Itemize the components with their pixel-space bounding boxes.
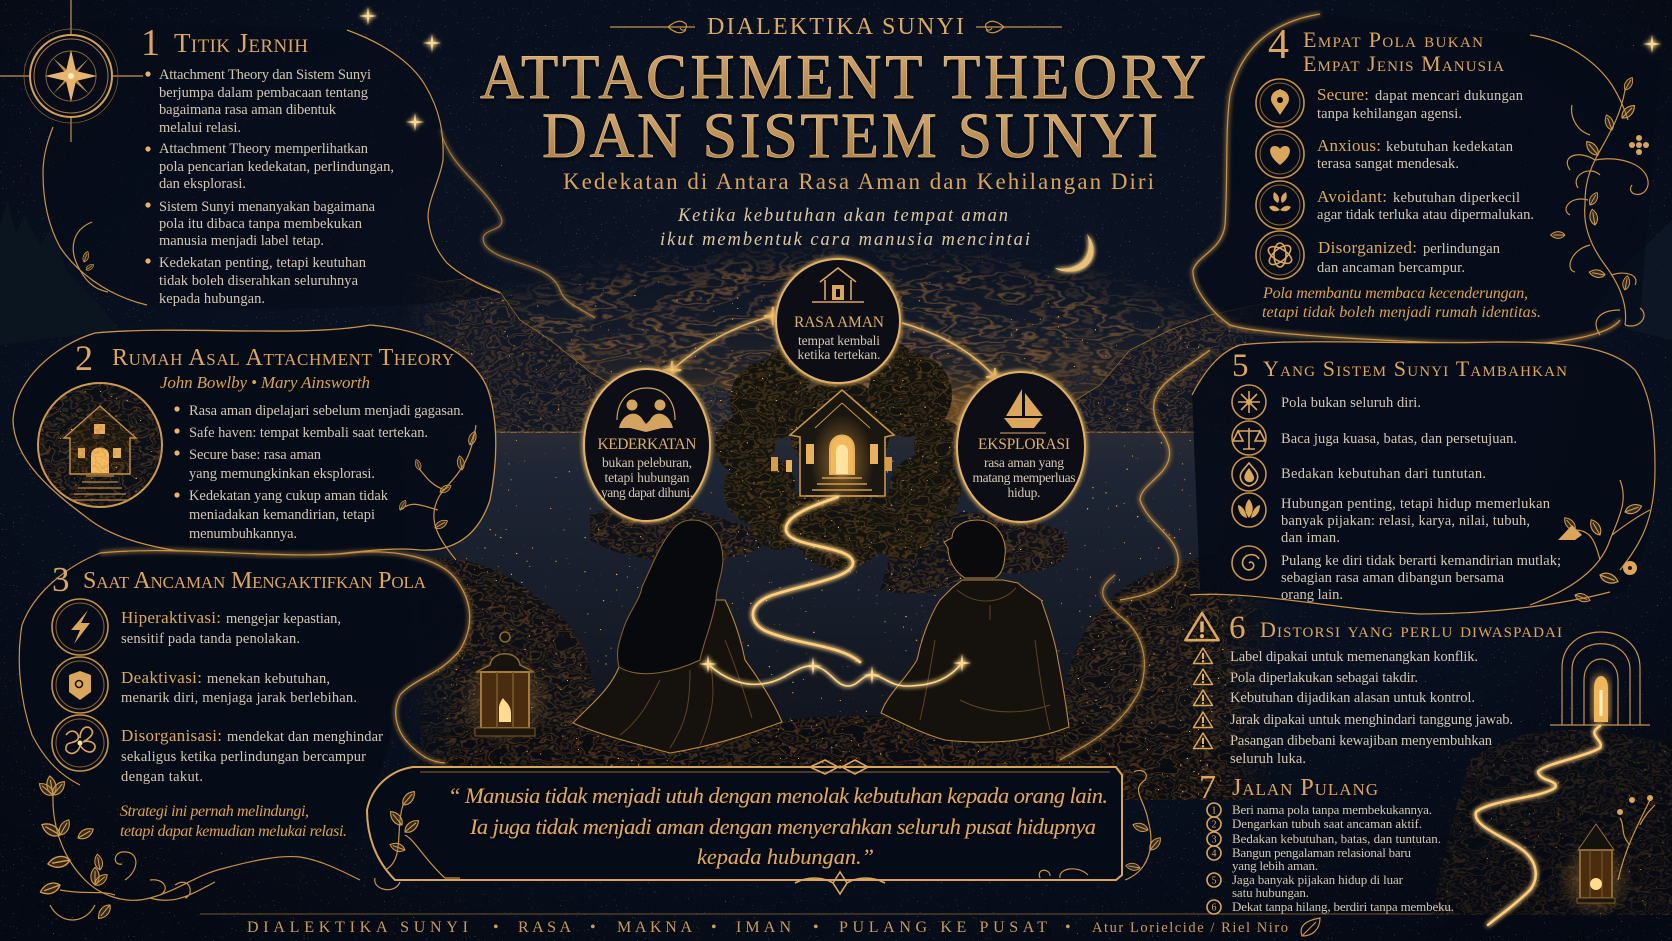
list: Kebutuhan dijadikan alasan untuk kontrol. <box>1230 690 1475 706</box>
circle: rasa aman: tempat kembali <box>798 333 880 348</box>
footer: IMAN <box>736 919 791 936</box>
heading: Rumah Asal Attachment Theory <box>112 345 454 371</box>
list: orang lain. <box>1281 587 1343 603</box>
note: Pola membantu membaca kecenderungan, <box>1262 285 1528 302</box>
left lantern <box>459 632 551 746</box>
crescent moon <box>1055 234 1094 272</box>
icon: lightning <box>52 599 108 655</box>
list: Hubungan penting, tetapi hidup memerlukan <box>1281 496 1551 512</box>
bullet list: manusia menjadi label tetap. <box>159 233 324 249</box>
vine lantern <box>1617 795 1655 880</box>
wavy gold link between right panels <box>1060 575 1144 760</box>
central landscape scene <box>380 240 1300 800</box>
list: kebutuhan diperkecil <box>1393 190 1520 206</box>
numbered list: 2 <box>1212 820 1216 830</box>
heading: Saat Ancaman Mengaktifkan Pola <box>83 568 427 594</box>
list: Anxious: <box>1317 136 1381 155</box>
bullet list: Rasa aman dipelajari sebelum menjadi gagasan. <box>189 403 464 419</box>
heading: Distorsi yang perlu diwaspadai <box>1260 617 1562 642</box>
bullet list: yang memungkinkan eksplorasi. <box>189 466 375 482</box>
list: Disorganisasi: <box>121 726 222 745</box>
circle: rasa aman <box>776 259 900 383</box>
vine ornament <box>1530 480 1650 605</box>
heading: 4 <box>1268 22 1289 68</box>
icon: knot <box>1256 231 1304 279</box>
panel 2: rumah asal <box>13 325 496 560</box>
circle: eksplorasi <box>957 372 1085 522</box>
heading <box>75 338 454 378</box>
numbered list <box>1207 803 1221 914</box>
ornament: top <box>810 760 868 774</box>
circle: kederkatan: yang dapat dihuni. <box>601 485 693 500</box>
tree crown around the house <box>715 341 966 570</box>
icon: drop <box>1232 457 1266 491</box>
vine ornament top right <box>1551 76 1649 335</box>
footer: • <box>711 919 717 936</box>
vine ornament <box>73 222 108 292</box>
right lantern <box>1557 824 1633 918</box>
list: Pola diperlakukan sebagai takdir. <box>1230 670 1418 686</box>
header kicker <box>610 14 1062 40</box>
vine ornament <box>398 425 478 560</box>
note: tetapi dapat kemudian melukai relasi. <box>120 823 347 840</box>
heading: Empat Pola bukan <box>1303 27 1483 52</box>
list: Jarak dipakai untuk menghindari tanggung jawab. <box>1230 712 1513 728</box>
list: terasa sangat mendesak. <box>1317 156 1459 172</box>
bullet list: melalui relasi. <box>159 120 241 136</box>
footer: • <box>493 919 499 936</box>
tagline: ikut membentuk cara manusia mencintai <box>660 230 1030 250</box>
icon: tangled knot <box>52 715 108 771</box>
circle: rasa aman: RASA AMAN <box>794 314 884 331</box>
list: agar tidak terluka atau dipermalukan. <box>1317 207 1534 223</box>
list: mendekat dan menghindar <box>227 729 383 745</box>
list: Deaktivasi: <box>121 668 202 687</box>
arch doorway <box>1550 632 1650 725</box>
circle: eksplorasi: hidup. <box>1008 485 1040 500</box>
horizon glow <box>689 378 978 422</box>
list: sebagian rasa aman dibangun bersama <box>1281 570 1505 586</box>
list: Bedakan kebutuhan dari tuntutan. <box>1281 466 1486 482</box>
girl silhouette <box>573 520 782 753</box>
footer: RASA <box>518 919 571 936</box>
list: dapat mencari dukungan <box>1375 88 1524 104</box>
title: DAN SISTEM SUNYI <box>542 100 1158 171</box>
bullet list: tidak boleh diserahkan seluruhnya <box>159 273 359 289</box>
sky stars <box>502 242 1194 388</box>
numbered list: 1 <box>1212 806 1216 816</box>
footer: DIALEKTIKA SUNYI <box>247 919 468 936</box>
bullet list: Safe haven: tempat kembali saat tertekan. <box>189 425 428 441</box>
heading <box>1199 769 1378 806</box>
note: tetapi tidak boleh menjadi rumah identitas. <box>1262 304 1541 321</box>
title <box>480 41 1206 171</box>
list: Beri nama pola tanpa membekukannya. <box>1232 802 1432 817</box>
quote panel <box>367 760 1163 894</box>
list: Pulang ke diri tidak berarti kemandirian mutlak; <box>1281 553 1561 569</box>
panel 4: empat pola <box>1193 14 1660 345</box>
warning icons <box>1194 648 1212 748</box>
glowing winding path <box>753 497 860 662</box>
heading: Titik Jernih <box>174 28 308 58</box>
icon: compass star <box>0 0 143 142</box>
wavy trail left of sky <box>440 130 595 318</box>
list: seluruh luka. <box>1230 751 1306 767</box>
bullet list: menumbuhkannya. <box>189 526 297 542</box>
ornament: bottom <box>795 872 885 894</box>
icon: sailboat <box>1000 389 1046 433</box>
heading: 6 <box>1229 610 1246 646</box>
icon: sprout <box>1256 181 1304 229</box>
icon: home <box>812 268 864 302</box>
footer: • <box>1065 919 1071 936</box>
panel 6: distorsi <box>1185 610 1562 767</box>
note <box>1262 285 1541 321</box>
list: Pola bukan seluruh diri. <box>1281 395 1421 411</box>
icon: scales <box>1232 421 1266 455</box>
bullet list <box>174 403 464 542</box>
quote text: Ia juga tidak menjadi aman dengan menyerahkan seluruh pusat hidupnya <box>469 814 1096 839</box>
note: Strategi ini pernah melindungi, <box>120 803 309 820</box>
list: dan iman. <box>1281 530 1340 546</box>
bullet list: Sistem Sunyi menanyakan bagaimana <box>159 199 376 215</box>
list <box>1232 802 1454 914</box>
bottom right rocky ground <box>1430 730 1672 915</box>
bullet list: Kedekatan yang cukup aman tidak <box>189 488 389 504</box>
list: Pasangan dibebani kewajiban menyembuhkan <box>1230 733 1493 749</box>
bullet list: Attachment Theory memperlihatkan <box>159 141 369 157</box>
right forest silhouettes <box>1590 220 1672 340</box>
bullet list: Kedekatan penting, tetapi keutuhan <box>159 255 367 271</box>
circle: eksplorasi: rasa aman yang <box>984 455 1064 470</box>
circle: eksplorasi: EKSPLORASI <box>978 436 1070 453</box>
icon: heart <box>1256 130 1304 178</box>
list <box>1230 649 1513 767</box>
panel frame <box>13 325 496 558</box>
sparkle stars <box>359 7 1661 131</box>
bullet list: Secure base: rasa aman <box>189 447 322 463</box>
list: dan ancaman bercampur. <box>1317 260 1465 276</box>
icon: leaf <box>1301 918 1320 936</box>
numbered list: 6 <box>1212 902 1216 914</box>
list: dengan takut. <box>121 769 203 785</box>
list: Dekat tanpa hilang, berdiri tanpa membeku. <box>1232 899 1454 914</box>
heading <box>141 22 308 64</box>
heading <box>1229 610 1562 646</box>
glowing path home <box>1476 726 1601 925</box>
heading: 1 <box>141 22 160 64</box>
heading: Yang Sistem Sunyi Tambahkan <box>1263 356 1567 381</box>
icon: star <box>1232 385 1266 419</box>
list: Dengarkan tubuh saat ancaman aktif. <box>1232 816 1422 831</box>
gold clouds <box>502 244 1214 426</box>
circle: rasa aman: ketika tertekan. <box>798 347 880 362</box>
tagline: Ketika kebutuhan akan tempat aman <box>677 206 1008 226</box>
icon: lotus <box>1232 493 1266 527</box>
footer: MAKNA <box>617 919 692 936</box>
bullet list: meniadakan kemandirian, tetapi <box>189 507 375 523</box>
list <box>1317 85 1534 276</box>
icon: two people <box>617 388 675 432</box>
house <box>771 390 894 510</box>
list: sekaligus ketika perlindungan bercampur <box>121 749 366 765</box>
list: menarik diri, menjaga jarak berlebihan. <box>121 690 357 706</box>
list: Disorganized: <box>1318 238 1417 257</box>
bullet list <box>145 67 394 307</box>
subtitle: Kedekatan di Antara Rasa Aman dan Kehilangan Diri <box>563 169 1154 194</box>
night sky <box>506 244 1207 426</box>
list: satu hubungan. <box>1232 885 1309 900</box>
bullet list: bagaimana rasa aman dibentuk <box>159 102 337 118</box>
list: Bedakan kebutuhan, batas, dan tuntutan. <box>1232 831 1441 846</box>
list: Hiperaktivasi: <box>121 608 221 627</box>
circle: kederkatan <box>584 369 710 521</box>
note <box>120 803 347 840</box>
numbered list: 5 <box>1212 876 1216 886</box>
tagline <box>660 206 1030 250</box>
panel 5: yang sistem sunyi tambahkan <box>1190 342 1655 614</box>
list: perlindungan <box>1423 241 1501 257</box>
list: sensitif pada tanda penolakan. <box>121 631 300 647</box>
circle: kederkatan: bukan peleburan, <box>602 455 692 470</box>
heading <box>52 560 427 599</box>
panel frame <box>43 20 500 309</box>
quote text: “ Manusia tidak menjadi utuh dengan menolak kebutuhan kepada orang lain. <box>448 783 1108 808</box>
list: mengejar kepastian, <box>226 611 341 627</box>
heading: 3 <box>52 560 70 599</box>
city light band <box>500 432 1194 433</box>
connecting thread <box>699 654 971 686</box>
list: Avoidant: <box>1317 187 1387 206</box>
rock masses <box>400 505 1280 800</box>
panel frame <box>1193 14 1660 345</box>
heading: 2 <box>75 338 93 378</box>
list: Label dipakai untuk memenangkan konflik. <box>1230 649 1478 665</box>
panel 7: jalan pulang <box>1199 769 1454 914</box>
bullet list: pola itu dibaca tanpa membekukan <box>159 216 363 232</box>
house medallion <box>38 383 162 507</box>
circle: kederkatan: KEDERKATAN <box>598 436 696 453</box>
heading <box>1268 22 1504 76</box>
footer: • <box>813 919 819 936</box>
icon: large warning <box>1185 613 1219 640</box>
bullet list: berjumpa dalam pembacaan tentang <box>159 85 368 101</box>
numbered list: 3 <box>1212 834 1216 846</box>
icon: spiral <box>1232 546 1266 580</box>
list: banyak pijakan: relasi, karya, nilai, tubuh, <box>1281 513 1530 529</box>
list <box>1281 395 1561 603</box>
list: Baca juga kuasa, batas, dan persetujuan. <box>1281 431 1517 447</box>
list: yang lebih aman. <box>1232 858 1318 873</box>
circle: eksplorasi: matang memperluas <box>972 470 1076 485</box>
circle: kederkatan: tetapi hubungan <box>604 470 690 485</box>
left forest silhouettes <box>0 200 120 345</box>
numbered list: 4 <box>1212 848 1216 860</box>
heading: 5 <box>1232 348 1248 384</box>
footer: • <box>590 919 596 936</box>
authors: John Bowlby • Mary Ainsworth <box>160 373 370 392</box>
list: Jaga banyak pijakan hidup di luar <box>1232 872 1404 887</box>
footer <box>200 914 1460 936</box>
lake <box>400 428 1280 728</box>
panel frame <box>19 551 470 860</box>
icon: pin <box>1256 79 1304 127</box>
list <box>121 608 383 785</box>
vine ornament bottom left <box>37 775 360 921</box>
quote text <box>448 783 1108 869</box>
icon: shield <box>52 657 108 713</box>
footer: PULANG KE PUSAT <box>839 919 1047 936</box>
bullet list: dan eksplorasi. <box>159 176 246 192</box>
list: Bangun pengalaman relasional baru <box>1232 845 1412 860</box>
footer: Atur Lorielcide / Riel Niro <box>1092 920 1288 936</box>
vine left <box>375 789 460 890</box>
bullet list: Attachment Theory dan Sistem Sunyi <box>159 67 371 83</box>
heading <box>1232 348 1567 384</box>
panel frame <box>1192 342 1655 614</box>
bullet list: kepada hubungan. <box>159 291 265 307</box>
header kicker: DIALEKTIKA SUNYI <box>707 14 964 40</box>
heading: 7 <box>1199 769 1216 806</box>
list: menekan kebutuhan, <box>207 671 330 687</box>
list: kebutuhan kedekatan <box>1386 139 1514 155</box>
boy silhouette <box>881 520 1069 742</box>
heading: Empat Jenis Manusia <box>1303 51 1504 76</box>
list: tanpa kehilangan agensi. <box>1317 106 1462 122</box>
lake sparkles <box>400 428 1280 728</box>
list: Secure: <box>1317 85 1369 104</box>
vine right <box>1039 770 1163 880</box>
connector arcs <box>663 307 1004 386</box>
bullet list: pola pencarian kedekatan, perlindungan, <box>159 159 394 175</box>
heading: Jalan Pulang <box>1232 775 1378 801</box>
quote text: kepada hubungan.” <box>697 844 874 869</box>
panel 3: saat ancaman <box>19 551 470 860</box>
title: ATTACHMENT THEORY <box>480 41 1206 112</box>
panel 1: titik jernih <box>0 0 500 309</box>
distant mountains <box>400 270 1280 432</box>
